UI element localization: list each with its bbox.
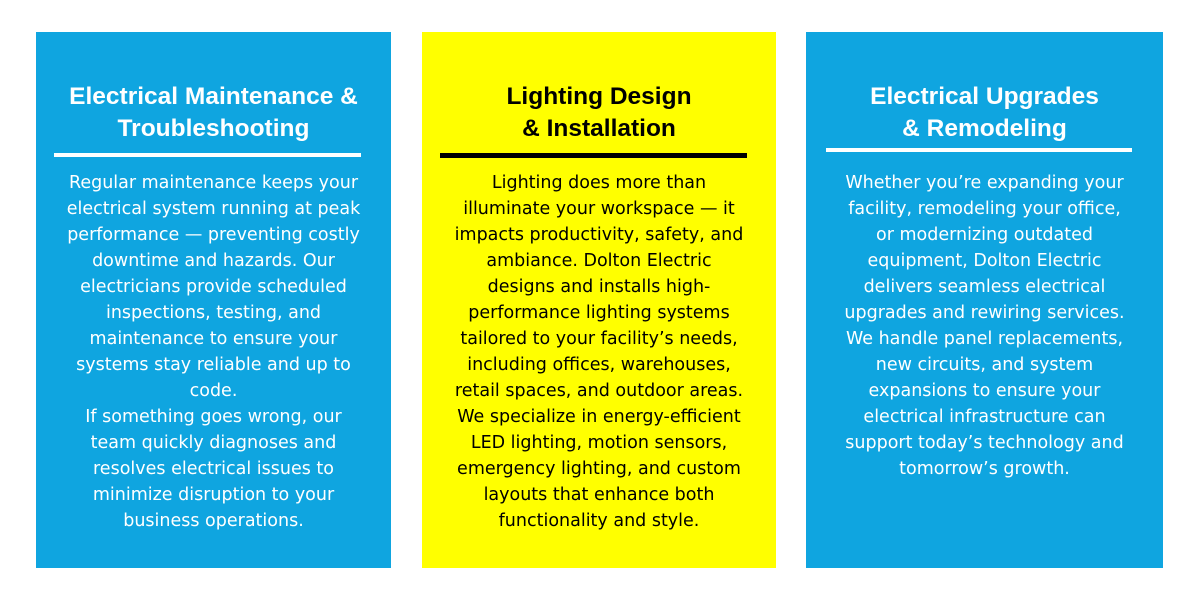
text: maintenance body: resolves electrical issues to: [93, 459, 334, 479]
text: maintenance body: business operations.: [123, 511, 304, 531]
text: maintenance body: If something goes wrong, our: [85, 407, 342, 427]
heading: maintenance: Troubleshooting: [118, 115, 309, 142]
text: lighting body: LED lighting, motion sensors,: [471, 433, 727, 453]
text: maintenance body: electricians provide scheduled: [80, 277, 347, 297]
text: upgrades body: Whether you’re expanding your: [845, 173, 1124, 193]
text: maintenance body: team quickly diagnoses and: [91, 433, 336, 453]
text: upgrades body: facility, remodeling your office,: [848, 199, 1121, 219]
heading: upgrades: [870, 83, 1099, 142]
heading: lighting: & Installation: [522, 115, 676, 142]
text: upgrades body: delivers seamless electrical: [864, 277, 1105, 297]
heading: lighting: Lighting Design: [506, 83, 692, 110]
heading: upgrades: Electrical Upgrades: [870, 83, 1099, 110]
text: upgrades body: equipment, Dolton Electric: [868, 251, 1101, 271]
text: lighting body: performance lighting systems: [468, 303, 730, 323]
text: maintenance body: inspections, testing, and: [106, 303, 321, 323]
text: lighting body: layouts that enhance both: [484, 485, 714, 505]
text: upgrades body: [844, 173, 1125, 479]
text: maintenance body: electrical system running at peak: [67, 199, 360, 219]
text: upgrades body: new circuits, and system: [876, 355, 1093, 375]
text: lighting body: emergency lighting, and custom: [457, 459, 741, 479]
text: lighting body: including offices, warehouses,: [467, 355, 731, 375]
text: lighting body: designs and installs high-: [488, 277, 710, 297]
text: maintenance body: [67, 173, 360, 531]
panel: lighting design: [422, 32, 776, 568]
text: upgrades body: electrical infrastructure can: [863, 407, 1106, 427]
text: lighting body: functionality and style.: [499, 511, 699, 531]
panel: upgrades: [806, 32, 1163, 568]
text: maintenance body: systems stay reliable and up to: [76, 355, 351, 375]
text: upgrades body: support today’s technology and: [845, 433, 1124, 453]
text: lighting body: impacts productivity, safety, and: [455, 225, 743, 245]
text: maintenance body: downtime and hazards. Our: [92, 251, 335, 271]
text: lighting body: We specialize in energy-efficient: [457, 407, 741, 427]
text: lighting body: tailored to your facility’s needs,: [460, 329, 738, 349]
text: maintenance body: code.: [190, 381, 237, 401]
panel: electrical maintenance: [36, 32, 391, 568]
heading: maintenance: [69, 83, 358, 142]
text: upgrades body: We handle panel replacements,: [846, 329, 1123, 349]
text: maintenance body: minimize disruption to your: [93, 485, 334, 505]
text: upgrades body: expansions to ensure your: [869, 381, 1100, 401]
text: maintenance body: performance — preventing costly: [67, 225, 360, 245]
text: lighting body: illuminate your workspace — it: [463, 199, 735, 219]
text: lighting body: Lighting does more than: [492, 173, 706, 193]
text: maintenance body: maintenance to ensure your: [90, 329, 337, 349]
text: lighting body: retail spaces, and outdoor areas.: [455, 381, 743, 401]
heading: maintenance: Electrical Maintenance &: [69, 83, 358, 110]
heading: upgrades: & Remodeling: [902, 115, 1067, 142]
text: upgrades body: upgrades and rewiring services.: [844, 303, 1125, 323]
text: lighting body: ambiance. Dolton Electric: [486, 251, 712, 271]
text: lighting body: [455, 173, 743, 531]
text: upgrades body: or modernizing outdated: [876, 225, 1093, 245]
text: upgrades body: tomorrow’s growth.: [899, 459, 1070, 479]
heading: lighting: [506, 83, 692, 142]
text: maintenance body: Regular maintenance keeps your: [69, 173, 358, 193]
